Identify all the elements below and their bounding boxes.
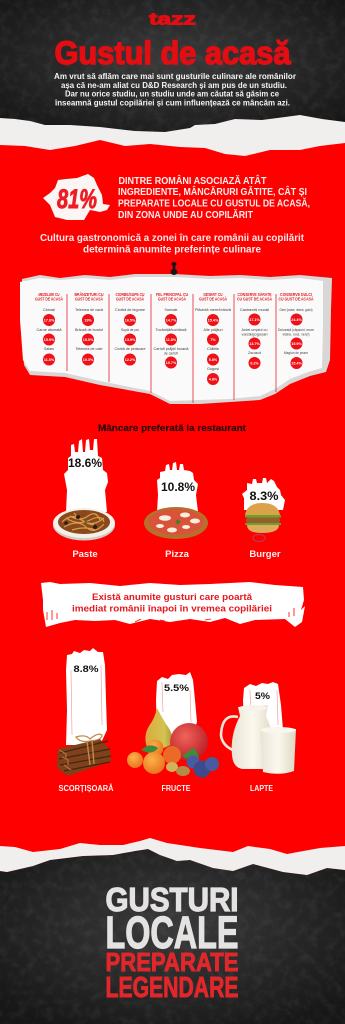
icon: pizza	[144, 507, 208, 539]
table column: ciorbă/supe	[114, 292, 146, 366]
table column: mezeluri: 15.9%	[44, 338, 55, 342]
table column: desert	[195, 292, 232, 385]
table column: brânzeturi: 19%	[84, 318, 92, 322]
table column: fel principal: Cartofi prăjiți/ tocană	[154, 346, 189, 351]
logo: tazz: tazz	[149, 10, 196, 28]
table column: ciorbă/supe: Ciorbă de perișoare	[114, 346, 146, 351]
intro text block: așa că ne-am aliat cu D&D Research și am pus de un studiu.	[61, 81, 287, 90]
table column: conserve sărate: 13.7%	[249, 342, 260, 346]
table column: ciorbă/supe: Supă de pui	[121, 327, 139, 332]
table column: conserve dulci: 15.9%	[291, 342, 302, 346]
closing title	[106, 881, 238, 1004]
label: Paste: Paste	[72, 549, 98, 560]
stat: 81%: 81%	[57, 184, 97, 214]
table column: conserve dulci: CONSERVE DULCI	[280, 292, 312, 297]
icon: fruit pile	[127, 708, 219, 778]
table column: desert: Gogoși	[207, 366, 219, 371]
table column: desert: 4.8%	[209, 377, 218, 381]
table column: desert: Clătite	[207, 346, 220, 351]
stat callout: 81%	[43, 174, 310, 221]
table column: conserve sărate: varză/gogoșari	[242, 332, 268, 336]
table column: mezeluri: Salam	[44, 346, 55, 351]
stat description: DINTRE ROMÂNI ASOCIAZĂ ATÂT	[118, 174, 267, 187]
table column: ciorbă/supe: CIORBE/SUPE CU	[116, 292, 144, 297]
brush stroke background	[41, 582, 305, 627]
flame bar milk	[243, 682, 283, 735]
heading: restaurant food: Mâncare preferată la restaurant	[98, 423, 247, 434]
label: SCORȚIȘOARĂ: SCORȚIȘOARĂ	[58, 784, 114, 793]
table column: brânzeturi: Telemea de oaie	[76, 346, 103, 351]
torn paper strip: header	[0, 115, 345, 156]
table column: conserve sărate: Ardei umplut cu	[242, 327, 268, 332]
flame bar pizza	[157, 462, 198, 512]
panel: dark footer background	[0, 845, 345, 1024]
table column: conserve sărate: CU GUST DE ACASĂ	[237, 296, 272, 302]
table column: ciorbă/supe: 12.2%	[125, 358, 136, 362]
table column: fel principal: FEL PRINCIPAL CU	[156, 292, 188, 297]
intro text block	[54, 72, 296, 108]
table column: brânzeturi	[74, 292, 104, 366]
intro text block: înseamnă gustul copilăriei și cum influențează ce mâncăm azi.	[54, 98, 290, 108]
table column: conserve sărate: 17.1%	[249, 318, 260, 322]
bar: fructe	[127, 672, 219, 793]
table column: mezeluri: Cârnați	[43, 307, 55, 312]
icon: push pin	[170, 262, 178, 275]
table column: ciorbă/supe: Ciorbă de legume	[115, 307, 146, 312]
table column: conserve sărate: 9.2%	[250, 361, 259, 365]
column dividers	[67, 294, 276, 403]
panel: dark header background	[0, 0, 345, 135]
table column: desert: Alte prăjituri	[204, 327, 223, 332]
label: LAPTE: LAPTE	[250, 784, 273, 793]
table column: conserve dulci	[278, 292, 315, 369]
table column: fel principal: Sarmale	[164, 307, 178, 312]
table column: mezeluri: GUST DE ACASĂ	[35, 296, 63, 302]
table column: conserve sărate: Castraveți murați	[240, 307, 269, 312]
table column: brânzeturi: BRÂNZETURI CU	[74, 292, 104, 297]
flame bar cinnamon	[66, 648, 107, 745]
closing title: PREPARATE	[106, 947, 238, 977]
table column: brânzeturi: 10.3%	[83, 358, 94, 362]
banner text: Există anumite gusturi care poartă	[92, 592, 253, 602]
table column: conserve dulci: CU GUST DE ACASĂ	[278, 296, 314, 302]
table column: conserve dulci: vișine, nuci, verzi)	[282, 332, 310, 336]
table column: ciorbă/supe: 16.5%	[125, 318, 136, 322]
icon: cinnamon bundle	[57, 734, 111, 776]
bar: pizza	[144, 462, 208, 560]
table column: fel principal: 11.8%	[166, 338, 177, 342]
table column: conserve dulci: 24.4%	[291, 318, 302, 322]
table column: conserve dulci: Gem (caise, vișine, gutui)	[280, 307, 313, 312]
subheading: gastronomic culture: Cultura gastronomică a zonei în care românii au copilărit	[40, 232, 304, 244]
bar: burger	[242, 478, 285, 560]
label: Pizza: Pizza	[165, 549, 190, 560]
stat description: PREPARATE LOCALE CU GUSTUL DE ACASĂ,	[118, 196, 310, 210]
table column: conserve sărate: CONSERVE SĂRATE	[238, 292, 272, 297]
table column: fel principal	[154, 292, 189, 368]
stat description: DIN ZONA UNDE AU COPILĂRIT	[118, 208, 253, 221]
closing title: LEGENDARE	[106, 972, 238, 1004]
subheading: gastronomic culture	[40, 232, 304, 256]
table column: conserve dulci: 15.4%	[291, 361, 302, 365]
table column: mezeluri: MEZELURI CU	[38, 292, 60, 297]
label: Burger: Burger	[249, 549, 281, 560]
panel: torn paper table	[20, 262, 332, 404]
table column: desert: 7%	[210, 338, 216, 342]
table column: fel principal: GUST DE ACASĂ	[158, 296, 186, 302]
table column: ciorbă/supe: 13.9%	[125, 338, 136, 342]
label: FRUCTE: FRUCTE	[162, 784, 190, 793]
table column: mezeluri: 11.5%	[44, 358, 55, 362]
table column: conserve dulci: Magiun de prune	[284, 350, 309, 355]
value: 8.8%: 8.8%	[74, 664, 99, 675]
table column: brânzeturi: Brânză de burduf	[75, 327, 104, 332]
table column: mezeluri: Carne afumată	[36, 327, 62, 332]
table column: conserve sărate: Zacuscă	[248, 350, 262, 355]
table column: mezeluri: 17.8%	[44, 318, 55, 322]
table column: brânzeturi: 15.5%	[83, 338, 94, 342]
intro text block: Dar nu orice studiu, un studiu unde am căutat să găsim ce	[65, 90, 280, 98]
icon: milk jug and glass	[221, 705, 296, 774]
icon: burger	[245, 503, 281, 542]
table column: desert: GUST DE ACASĂ	[199, 296, 227, 302]
flame bar burger	[242, 478, 285, 510]
value: 5.5%: 5.5%	[164, 683, 190, 694]
banner text	[72, 592, 272, 614]
subheading: gastronomic culture: determină anumite preferințe culinare	[83, 244, 261, 256]
intro text block: Am vrut să aflăm care mai sunt gusturile culinare ale românilor	[54, 72, 296, 81]
value: 8.3%: 8.3%	[250, 491, 278, 503]
table column: fel principal: de cartofi	[164, 350, 178, 356]
value: 5%: 5%	[255, 691, 271, 702]
stat description: INGREDIENTE, MÂNCĂRURI GĂTITE, CÂT ȘI	[118, 185, 307, 198]
closing title: GUSTURI	[106, 881, 238, 918]
flame bar fruit	[156, 672, 197, 740]
table column: mezeluri	[35, 292, 63, 366]
flame bar paste	[64, 439, 108, 512]
closing title: LOCALE	[106, 907, 238, 958]
icon: pasta plate	[53, 508, 115, 540]
table column: conserve dulci: Dulceață (căpșuni, mure	[278, 327, 315, 332]
bar: lapte	[221, 682, 296, 793]
table column: desert: 15.4%	[208, 318, 219, 322]
table column: fel principal: 14.7%	[166, 318, 177, 322]
table column: fel principal: Tocăniță/tochitură	[156, 327, 187, 332]
value: 10.8%: 10.8%	[161, 482, 195, 494]
table column: desert: Plăcintă mere/brânză	[195, 307, 232, 312]
table column: ciorbă/supe: GUST DE ACASĂ	[116, 296, 144, 302]
title: Gustul de acasă	[54, 35, 291, 71]
banner: childhood tastes	[41, 582, 305, 627]
table column: conserve sărate	[237, 292, 272, 369]
bar: paste	[53, 439, 115, 560]
torn paper strip: footer	[0, 838, 345, 875]
table column: brânzeturi: Telemea de vacă	[75, 307, 104, 312]
table column: fel principal: 10.7%	[166, 361, 177, 365]
stat description	[118, 174, 310, 221]
table column: desert: 5.8%	[209, 358, 218, 362]
table column: brânzeturi: GUST DE ACASĂ	[75, 296, 103, 302]
icon: Romania map	[43, 174, 110, 220]
banner text: imediat românii înapoi în vremea copilăriei	[72, 604, 272, 614]
value: 18.6%: 18.6%	[68, 458, 102, 470]
table column: desert: DESERT CU	[204, 292, 222, 297]
bar: scorțișoară	[57, 648, 114, 793]
